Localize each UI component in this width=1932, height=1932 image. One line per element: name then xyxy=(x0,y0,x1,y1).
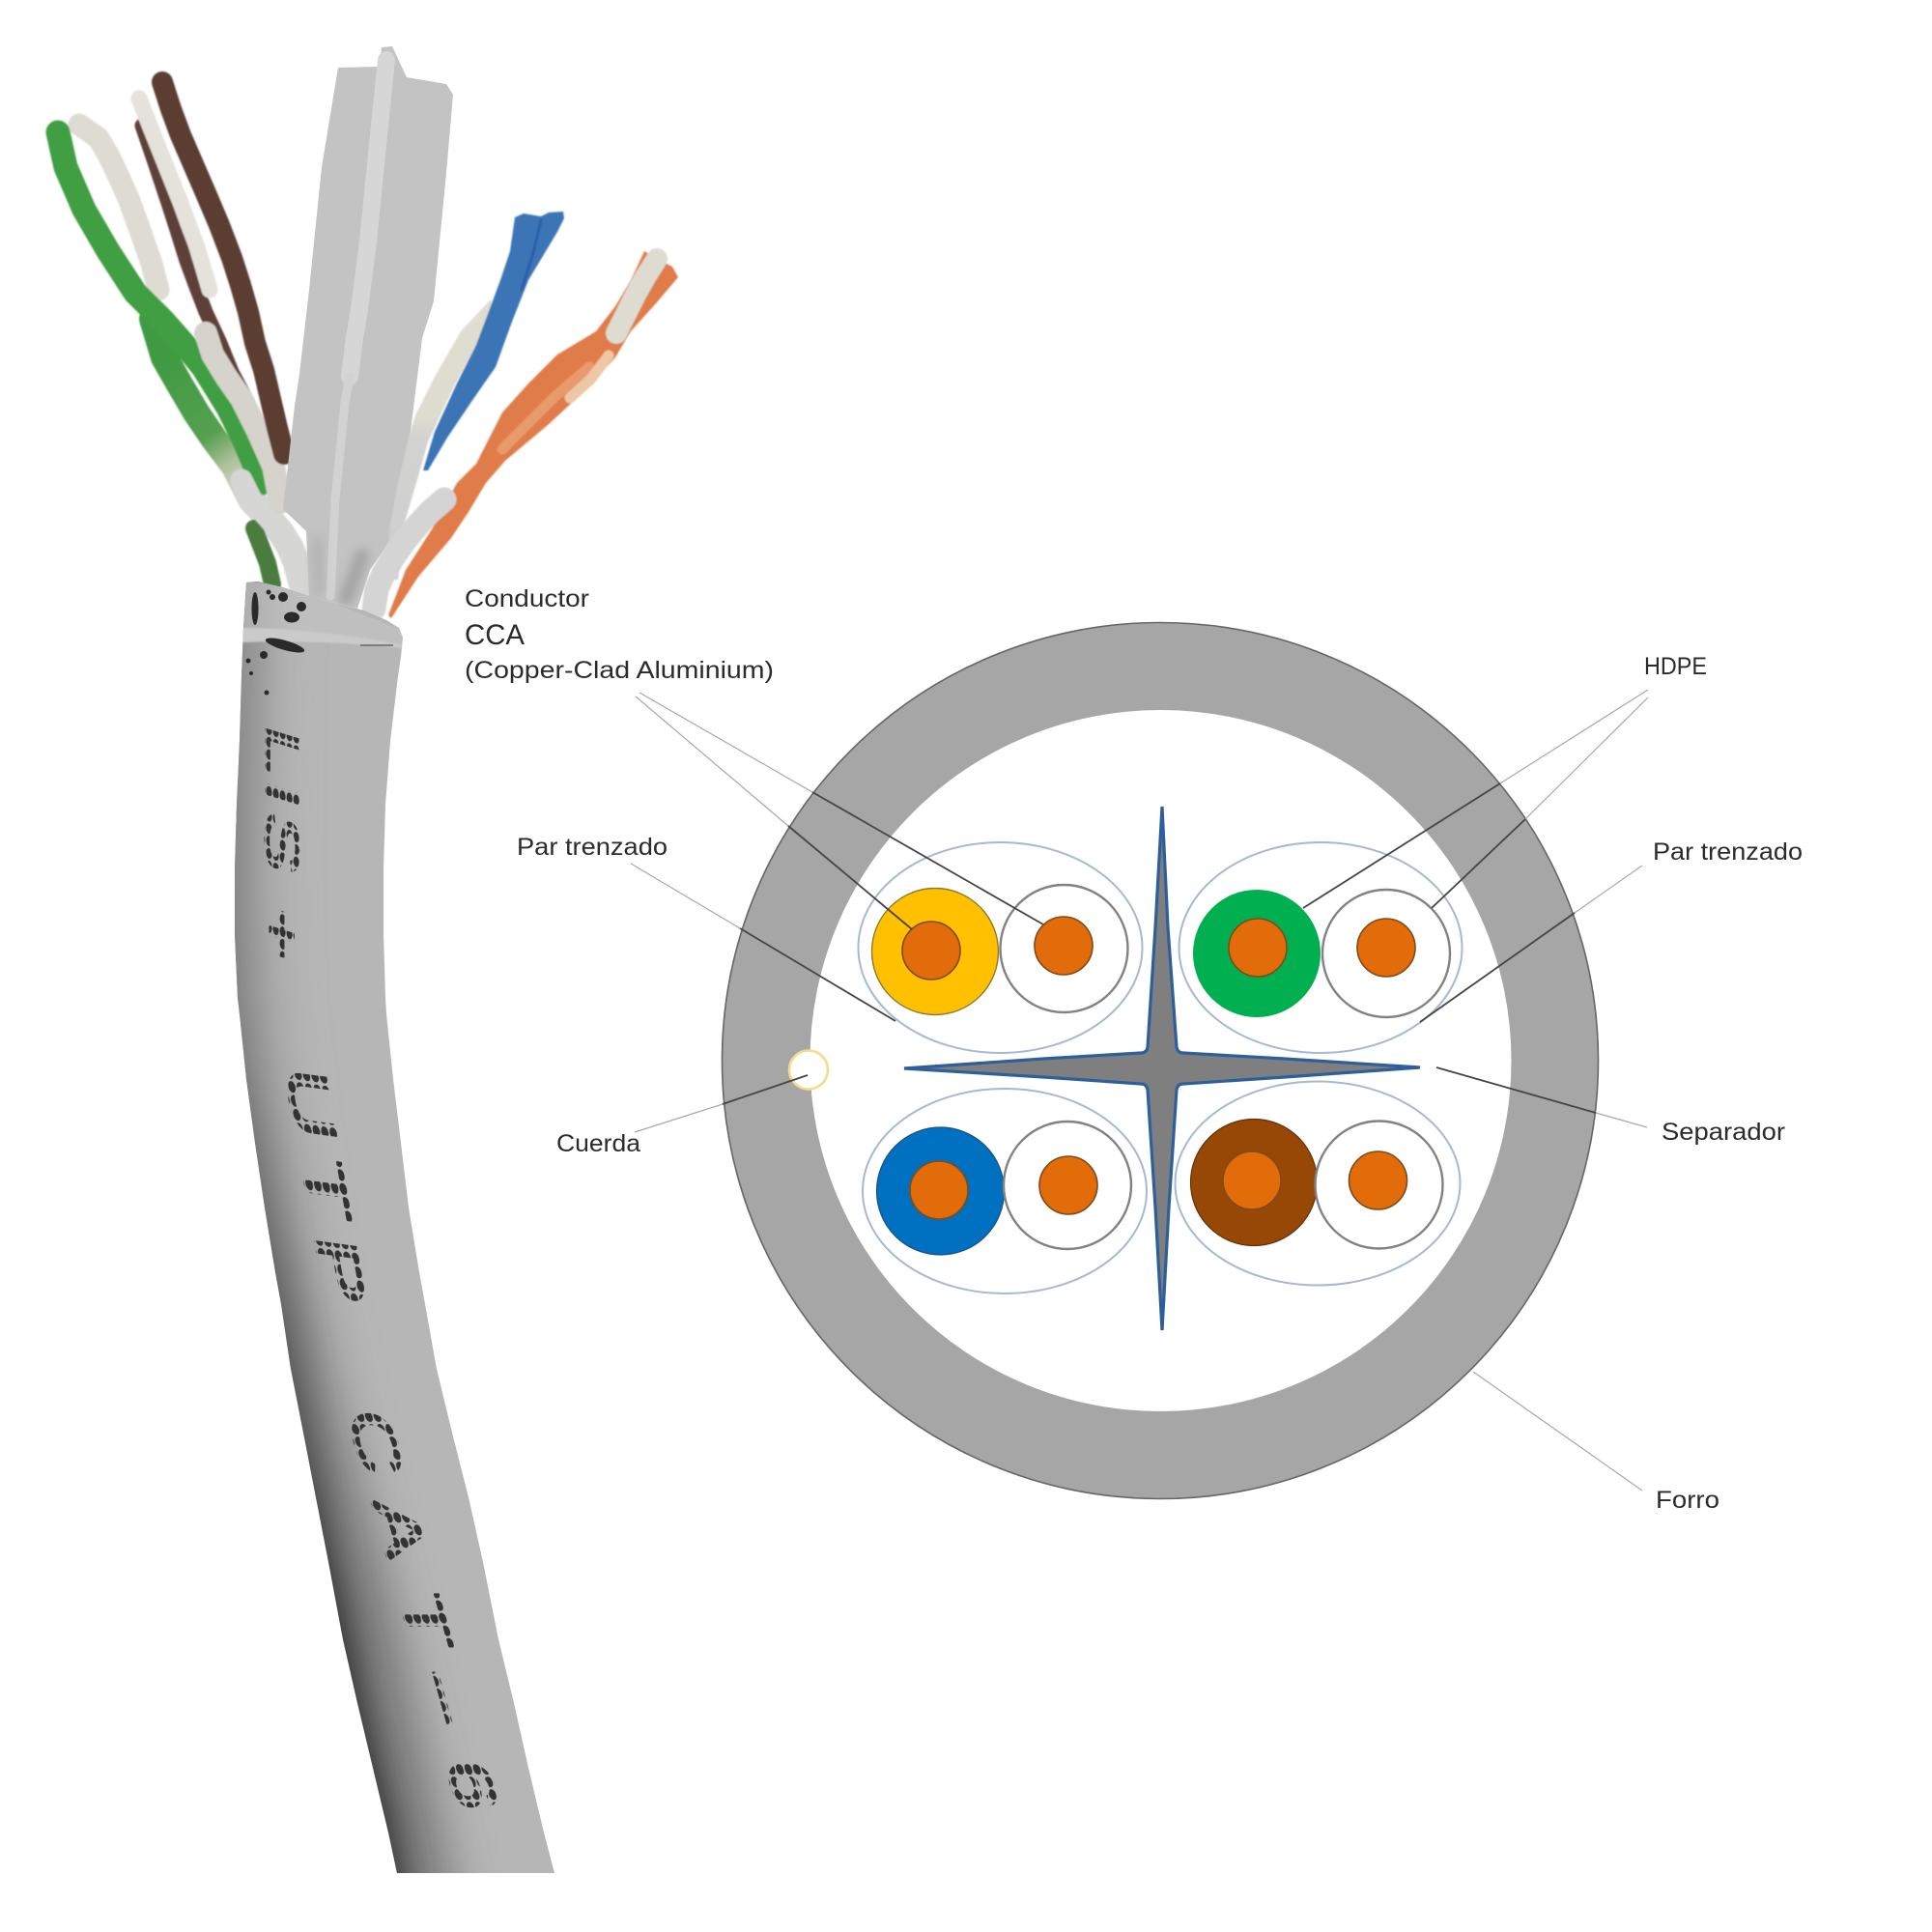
label: HDPE: HDPE xyxy=(1644,653,1707,680)
leader lines: conductor xyxy=(636,693,1043,929)
printed marking: CAT-6: CAT–6 xyxy=(332,1410,513,1810)
twisted pair: green xyxy=(1179,842,1463,1053)
label: cuerda: Cuerda xyxy=(556,1130,640,1157)
twisted pair: orange xyxy=(858,842,1142,1053)
wire pair: orange and white xyxy=(374,251,678,618)
wire pair: brown and white xyxy=(139,82,284,502)
jacket ring xyxy=(723,622,1598,1499)
leader lines: HDPE xyxy=(1303,690,1648,908)
printed marks at jacket top xyxy=(245,589,306,696)
twisted pair: brown xyxy=(1175,1082,1461,1285)
star separator xyxy=(904,807,1420,1330)
wire pair: green and white xyxy=(58,125,304,592)
wire pair: blue and white xyxy=(386,212,564,580)
leader line: forro xyxy=(1473,1372,1642,1491)
label: conductor CCA xyxy=(465,585,774,684)
label: conductor CCA: Conductor xyxy=(465,585,589,612)
photo: stripped UTP cable xyxy=(58,46,678,1932)
label: separador: Separador xyxy=(1662,1119,1785,1146)
leader line: separador xyxy=(1436,1067,1647,1127)
leader line: par trenzado right xyxy=(1420,866,1642,1022)
cavity xyxy=(810,710,1511,1411)
leader line: cuerda xyxy=(635,1075,808,1132)
separator fin xyxy=(283,46,453,609)
cable jacket xyxy=(235,582,554,1873)
printed marking: UTP: UTP xyxy=(270,1064,380,1308)
label: conductor CCA: CCA xyxy=(465,619,525,651)
label: forro: Forro xyxy=(1656,1487,1719,1514)
rope filler xyxy=(789,1051,828,1090)
leader line: par trenzado left xyxy=(631,864,895,1021)
label: par trenzado left: Par trenzado xyxy=(517,834,668,861)
cross-section diagram xyxy=(723,622,1598,1499)
printed marking: LIS+: LIS+ xyxy=(255,720,309,968)
twisted pair: blue xyxy=(863,1089,1147,1293)
label: par trenzado right: Par trenzado xyxy=(1653,838,1803,866)
label: conductor CCA: (Copper-Clad Aluminium) xyxy=(465,657,774,684)
